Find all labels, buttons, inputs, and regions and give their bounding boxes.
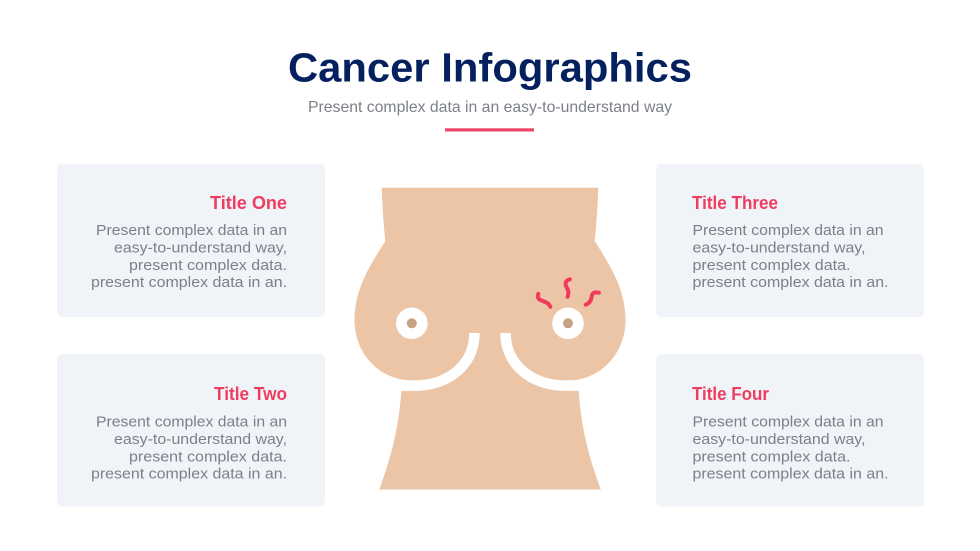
text block: title three body <box>692 222 888 291</box>
text block: title four body: Present complex data in an <box>692 414 884 430</box>
text block: title four body: present complex data. <box>692 448 850 466</box>
icon: red symptom marks <box>538 279 599 307</box>
panel: title one <box>57 164 325 317</box>
panel: title two <box>57 354 325 506</box>
text block: title three body: present complex data. <box>692 257 850 274</box>
text block: title two body: easy-to-understand way, <box>114 431 287 448</box>
illustration: torso with symptoms <box>354 188 626 489</box>
text block: title one body: easy-to-understand way, <box>114 240 287 256</box>
text block: title one body: present complex data. <box>129 257 287 274</box>
text block: title one body: present complex data in an. <box>91 274 287 291</box>
text block: title three body: Present complex data in an <box>692 222 884 239</box>
panel: title three <box>656 164 924 317</box>
subtitle: Present complex data in an easy-to-understand way <box>308 99 672 116</box>
title: Cancer Infographics <box>288 44 692 90</box>
panel: title four <box>656 354 924 506</box>
title underline accent <box>445 128 534 132</box>
text block: title two body <box>91 414 287 482</box>
text block: title four body <box>692 414 888 482</box>
left breast crease <box>400 333 474 386</box>
text block: title four body: easy-to-understand way, <box>692 431 866 448</box>
text block: title two body: present complex data. <box>129 448 287 466</box>
text block: title one body: Present complex data in an <box>96 222 287 239</box>
text block: title three body: present complex data in an. <box>692 274 888 291</box>
text block: title three body: easy-to-understand way, <box>692 240 866 256</box>
heading: title two: Title Two <box>214 383 287 404</box>
text block: title four body: present complex data in an. <box>692 466 888 482</box>
heading: title four: Title Four <box>692 383 769 404</box>
left nipple <box>396 308 428 339</box>
torso silhouette <box>354 188 626 489</box>
heading: title one: Title One <box>210 192 287 213</box>
text block: title one body <box>91 222 287 291</box>
text block: title two body: present complex data in an. <box>91 466 287 482</box>
text block: title two body: Present complex data in an <box>96 414 287 430</box>
right nipple <box>552 308 584 339</box>
right breast crease <box>506 333 580 386</box>
heading: title three: Title Three <box>692 192 778 213</box>
